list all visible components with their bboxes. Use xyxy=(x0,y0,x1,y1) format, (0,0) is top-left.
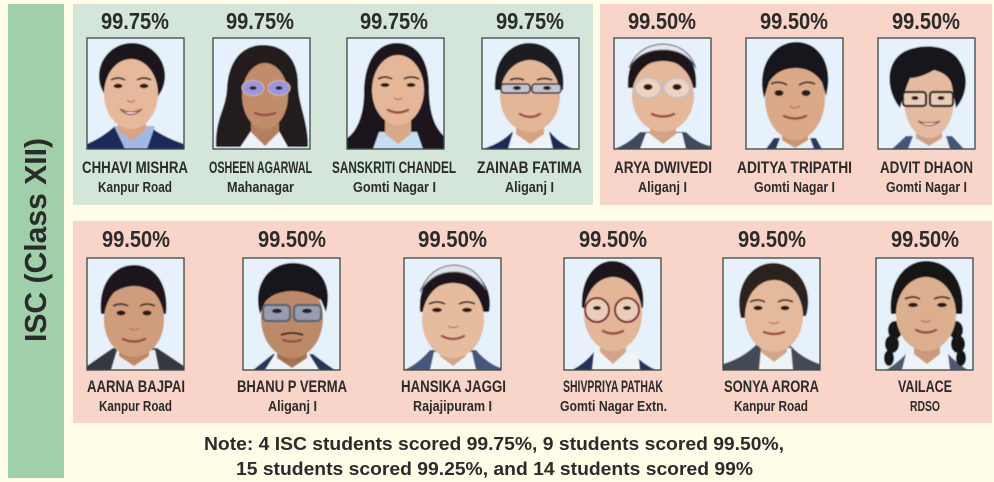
student: Arya Dwivedi: 99.50% xyxy=(628,8,696,34)
student: Bhanu P Verma: Aliganj I xyxy=(268,399,317,415)
note: Note: 4 ISC students scored 99.75%, 9 students scored 99.50%, xyxy=(204,434,784,454)
student: Zainab Fatima: ZAINAB FATIMA xyxy=(477,158,582,177)
student: Aarna Bajpai: Kanpur Road xyxy=(99,399,172,415)
panel: 99.75% scorers xyxy=(73,4,593,205)
student: Shivpriya Pathak: Gomti Nagar Extn. xyxy=(560,399,667,415)
student: Chhavi Mishra: CHHAVI MISHRA xyxy=(82,158,188,177)
student: Shivpriya Pathak: SHIVPRIYA PATHAK xyxy=(563,377,663,396)
photo: Shivpriya Pathak xyxy=(564,258,661,370)
student: Arya Dwivedi xyxy=(614,8,712,196)
student: Vailace: 99.50% xyxy=(891,226,959,252)
student: Hansika Jaggi: HANSIKA JAGGI xyxy=(401,377,506,396)
photo: Sonya Arora xyxy=(723,258,820,370)
note: 15 students scored 99.25%, and 14 students scored 99% xyxy=(236,459,753,479)
student: Aditya Tripathi: Gomti Nagar I xyxy=(754,180,835,196)
photo: Chhavi Mishra xyxy=(87,38,184,149)
student: Vailace: RDSO xyxy=(910,399,940,415)
student: Aarna Bajpai: 99.50% xyxy=(102,226,170,252)
student: Aditya Tripathi xyxy=(737,8,852,196)
student: Sanskriti Chandel: 99.75% xyxy=(360,8,428,34)
photo: Zainab Fatima xyxy=(482,38,579,149)
student: Zainab Fatima: 99.75% xyxy=(496,8,564,34)
photo: Sanskriti Chandel xyxy=(347,38,444,149)
sidebar: ISC (Class XII) xyxy=(8,4,64,478)
student: Zainab Fatima: Aliganj I xyxy=(505,180,554,196)
photo: Vailace xyxy=(876,258,973,370)
photo: Aarna Bajpai xyxy=(87,258,184,370)
student: Hansika Jaggi: Rajajipuram I xyxy=(413,399,492,415)
student: Chhavi Mishra: Kanpur Road xyxy=(98,180,172,196)
student: Osheen Agarwal: Mahanagar xyxy=(227,180,294,196)
student: Advit Dhaon: Gomti Nagar I xyxy=(886,180,967,196)
student: Arya Dwivedi: ARYA DWIVEDI xyxy=(614,158,712,177)
student: Chhavi Mishra xyxy=(82,8,188,196)
student: Osheen Agarwal: 99.75% xyxy=(226,8,294,34)
student: Aarna Bajpai xyxy=(87,226,185,415)
student: Arya Dwivedi: Aliganj I xyxy=(638,180,687,196)
photo: Bhanu P Verma xyxy=(243,258,340,370)
student: Shivpriya Pathak xyxy=(560,226,667,415)
student: Advit Dhaon: 99.50% xyxy=(892,8,960,34)
student: Bhanu P Verma: 99.50% xyxy=(258,226,326,252)
student: Aditya Tripathi: ADITYA TRIPATHI xyxy=(737,158,852,177)
student: Hansika Jaggi xyxy=(401,226,506,415)
note xyxy=(204,434,784,479)
student: Bhanu P Verma: BHANU P VERMA xyxy=(237,377,347,396)
student: Sonya Arora: SONYA ARORA xyxy=(724,377,819,396)
student: Shivpriya Pathak: 99.50% xyxy=(579,226,647,252)
student: Aditya Tripathi: 99.50% xyxy=(760,8,828,34)
student: Osheen Agarwal xyxy=(209,8,312,196)
photo: Advit Dhaon xyxy=(878,38,975,149)
student: Sanskriti Chandel xyxy=(332,8,456,196)
student: Sanskriti Chandel: Gomti Nagar I xyxy=(353,180,436,196)
photo: Osheen Agarwal xyxy=(213,38,310,149)
student: Advit Dhaon xyxy=(878,8,975,196)
icon: braids xyxy=(884,321,966,366)
sidebar: ISC (Class XII): ISC (Class XII) xyxy=(18,138,53,342)
student: Sonya Arora: 99.50% xyxy=(738,226,806,252)
student: Sonya Arora: Kanpur Road xyxy=(734,399,808,415)
student: Hansika Jaggi: 99.50% xyxy=(418,226,487,252)
student: Chhavi Mishra: 99.75% xyxy=(101,8,169,34)
photo: Aditya Tripathi xyxy=(746,38,843,149)
student: Bhanu P Verma xyxy=(237,226,347,415)
photo: Hansika Jaggi xyxy=(404,258,501,370)
photo: Arya Dwivedi xyxy=(614,38,711,149)
student: Vailace xyxy=(876,226,973,415)
student: Zainab Fatima xyxy=(477,8,582,196)
student: Sonya Arora xyxy=(723,226,820,415)
student: Aarna Bajpai: AARNA BAJPAI xyxy=(87,377,185,396)
panel: 99.50% scorers top row xyxy=(600,4,992,205)
student: Vailace: VAILACE xyxy=(898,377,952,396)
student: Sanskriti Chandel: SANSKRITI CHANDEL xyxy=(332,158,456,177)
panel: 99.50% scorers bottom row xyxy=(73,221,992,423)
student: Osheen Agarwal: OSHEEN AGARWAL xyxy=(209,158,312,177)
